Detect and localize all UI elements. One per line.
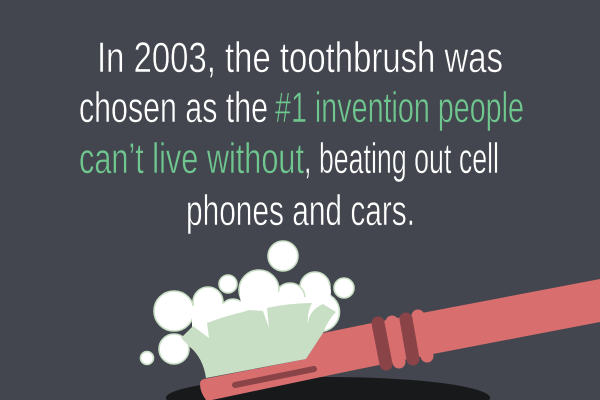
handle grip bands bbox=[378, 316, 427, 364]
title text: can’t live without bbox=[79, 135, 304, 183]
toothbrush shadow bbox=[166, 377, 490, 400]
soap bubbles bbox=[140, 241, 354, 364]
bristles bbox=[181, 303, 336, 378]
groove on head bbox=[235, 369, 314, 385]
merged foam behind bristles bbox=[192, 277, 338, 342]
toothbrush handle bbox=[200, 279, 600, 400]
icon: toothbrush bbox=[140, 241, 600, 400]
title text bbox=[79, 34, 524, 235]
title text: chosen as the bbox=[79, 84, 268, 132]
title text: phones and cars. bbox=[186, 187, 415, 235]
